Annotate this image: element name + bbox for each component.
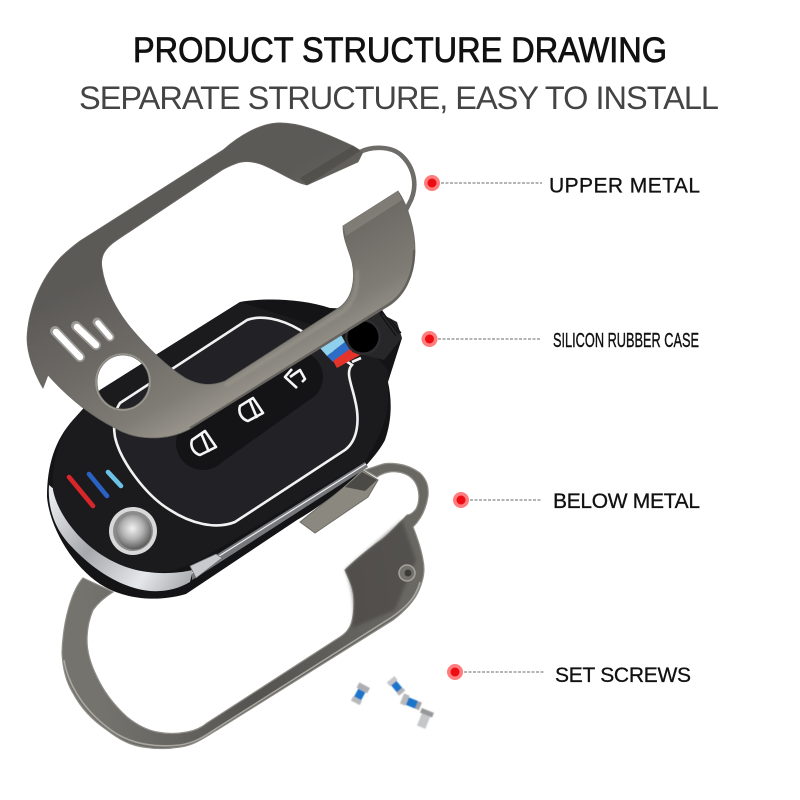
chrome rim <box>49 485 193 591</box>
callout: silicon rubber case: SILICON RUBBER CASE <box>553 330 699 352</box>
screw 4 <box>415 708 434 730</box>
shell clip tab <box>300 470 378 533</box>
white piping panel <box>114 318 358 525</box>
case base shadow <box>47 300 402 599</box>
shell body <box>27 123 415 438</box>
set screws <box>350 676 434 730</box>
button icon: unlock <box>239 398 263 421</box>
tab recess <box>345 472 377 491</box>
silicon rubber case <box>47 300 402 599</box>
shell rim highlight <box>64 582 420 746</box>
vent slot 2 <box>76 326 96 345</box>
button icon: trunk <box>285 369 305 388</box>
vent slot 1 <box>55 331 80 357</box>
callout: upper metal <box>424 174 700 198</box>
keyring port <box>345 312 402 360</box>
title: PRODUCT STRUCTURE DRAWING <box>133 31 667 70</box>
callout: silicon rubber case <box>422 330 699 352</box>
outer bottom edge shade <box>190 250 414 428</box>
button pad <box>176 351 323 470</box>
button icon: lock <box>191 431 216 455</box>
vent slot 3 <box>97 322 110 337</box>
screw 1 <box>350 682 370 706</box>
subtitle: SEPARATE STRUCTURE, EASY TO INSTALL <box>79 80 719 116</box>
chrome latch <box>190 554 222 578</box>
chrome side strip <box>192 462 368 580</box>
upper metal shell <box>27 123 415 438</box>
callout: set screws <box>447 664 691 687</box>
hole rim <box>96 354 150 410</box>
callout: upper metal: UPPER METAL <box>549 174 700 198</box>
piping tail <box>352 358 361 362</box>
lower metal shell <box>62 463 428 748</box>
screw 3 <box>400 693 423 711</box>
screw boss <box>399 565 415 581</box>
vent slot 2 opening <box>77 327 96 345</box>
top fold facet <box>300 146 360 185</box>
shell inner shadow <box>345 520 416 628</box>
vent slot 1 opening <box>56 332 80 357</box>
callout: set screws: SET SCREWS <box>555 664 691 687</box>
vent slot 3 opening <box>98 323 110 337</box>
callout: below metal <box>453 490 700 513</box>
chrome key button <box>109 507 157 555</box>
callout: below metal: BELOW METAL <box>553 490 700 513</box>
lower band edge highlight <box>225 270 357 386</box>
case top face <box>53 302 388 572</box>
shell ring loop <box>360 148 414 212</box>
screw 2 <box>387 676 406 696</box>
stripes red blue light blue <box>69 472 121 506</box>
colour flag bars <box>320 333 360 368</box>
right fold facet <box>343 191 402 236</box>
chrome strip highlight <box>192 464 366 573</box>
